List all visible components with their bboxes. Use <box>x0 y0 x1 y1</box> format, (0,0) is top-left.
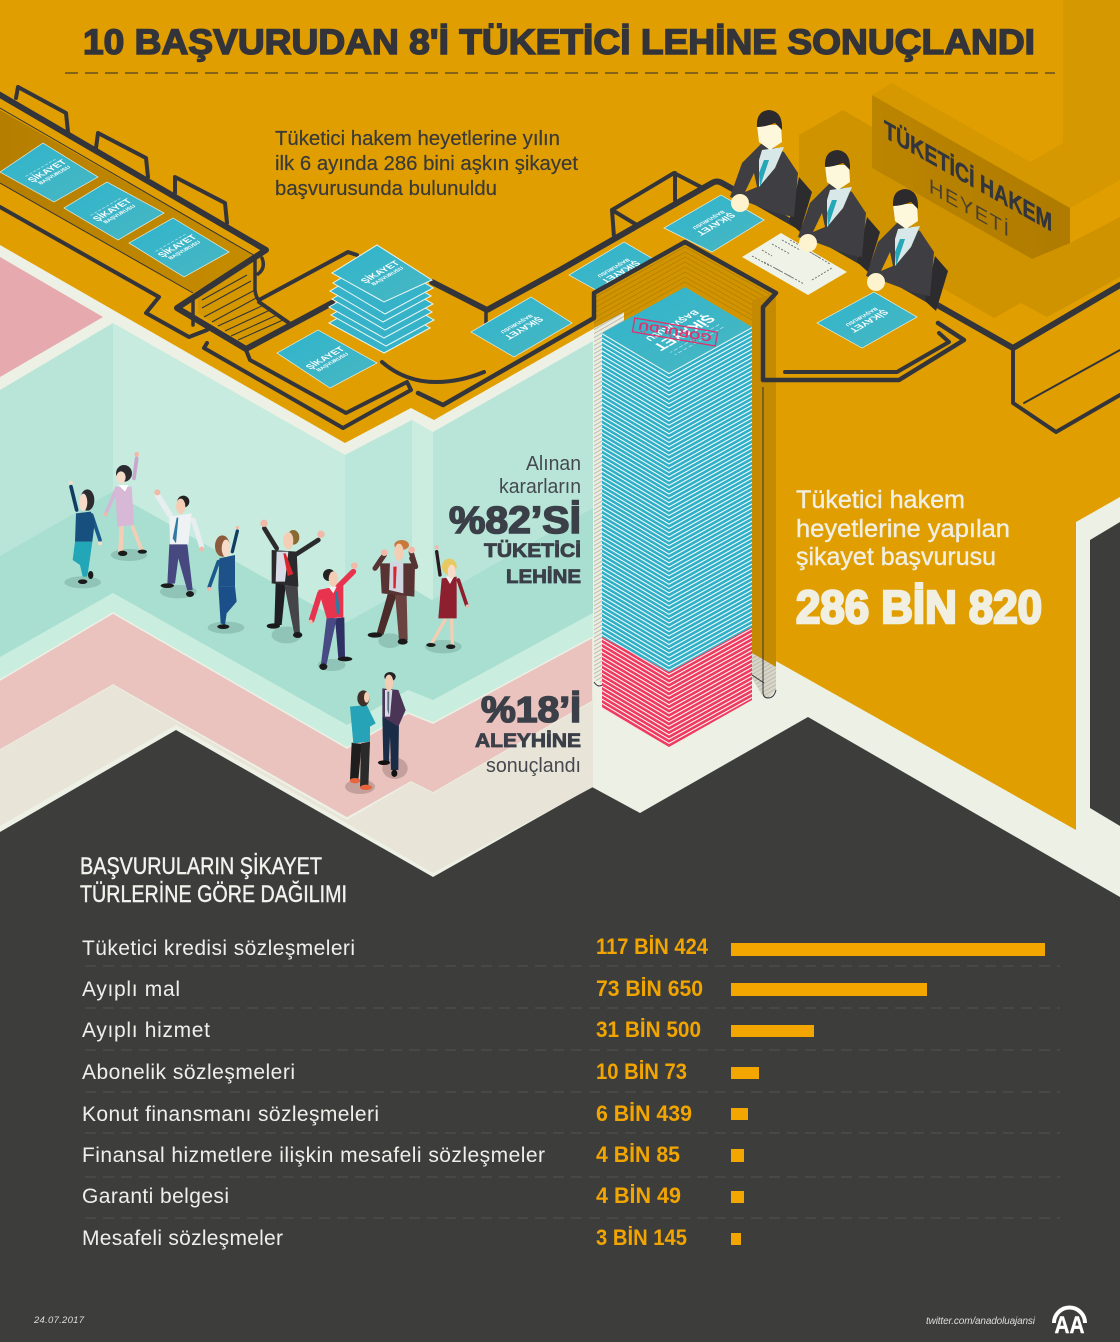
person: woman in blue suit <box>207 526 244 634</box>
inverted form right of pile: ŞİKAYET <box>501 315 546 341</box>
person: man in teal shirt <box>345 690 376 794</box>
red stamp: GÖRÜLDÜ <box>637 319 713 344</box>
callout: total complaints: heyetlerine yapılan <box>796 515 1010 543</box>
row: Mesafeli sözleşmeler: 3 BİN 145 <box>596 1225 687 1250</box>
row: Abonelik sözleşmeleri <box>82 1059 759 1084</box>
social handle: twitter.com/anadoluajansi <box>926 1316 1036 1327</box>
judges' backdrop with nameplate <box>799 0 1120 318</box>
callout: 18 percent against: ALEYHİNE <box>475 731 581 752</box>
pile of forms on table <box>329 245 434 353</box>
row: Garanti belgesi: 4 BİN 49 <box>596 1183 681 1208</box>
row: Garanti belgesi <box>82 1183 744 1208</box>
row: Mesafeli sözleşmeler: Mesafeli sözleşmeler <box>82 1227 283 1250</box>
callout: 82 percent in favour: %82’Sİ <box>449 500 581 542</box>
callout: total complaints <box>796 486 1042 633</box>
form 2: BAŞVURUSU <box>102 204 138 225</box>
title: 10 BAŞVURUDAN 8'İ TÜKETİCİ LEHİNE SONUÇLANDI <box>83 23 1035 62</box>
row: Konut finansmanı sözleşmeleri: Konut finansmanı sözleşmeleri <box>82 1103 379 1126</box>
callout: 82 percent in favour: LEHİNE <box>506 567 581 588</box>
judge 1 <box>730 110 812 232</box>
person: woman in lilac dress <box>104 452 147 561</box>
inverted form at first judge: BAŞVURUSU <box>690 209 726 230</box>
row: Ayıplı hizmet: 31 BİN 500 <box>596 1017 701 1042</box>
form near front of table: BAŞVURUSU <box>315 352 351 373</box>
callout: total complaints: 286 BİN 820 <box>796 581 1042 633</box>
person: man in brown suit <box>368 540 416 648</box>
inverted form right of pile: BAŞVURUSU <box>498 313 534 334</box>
callout: total complaints: şikayet başvurusu <box>796 543 996 571</box>
row: Konut finansmanı sözleşmeleri: 6 BİN 439 <box>596 1101 692 1126</box>
person: man in purple suit <box>378 672 408 779</box>
title divider <box>65 72 1055 74</box>
inverted form at third judge: ŞİKAYET <box>846 308 891 334</box>
intro text <box>275 128 578 200</box>
pile of forms on table: BAŞVURUSU <box>370 266 406 287</box>
row: Tüketici kredisi sözleşmeleri: 117 BİN 424 <box>596 934 709 959</box>
section heading <box>80 853 347 908</box>
row: Garanti belgesi: Garanti belgesi <box>82 1185 229 1208</box>
inverted form at third judge: BAŞVURUSU <box>843 306 879 327</box>
inverted form at third judge <box>817 292 917 348</box>
bar chart: complaint types <box>82 934 1045 1250</box>
top form of stack: ŞİKAYET <box>648 312 719 353</box>
intro text: ilk 6 ayında 286 bini aşkın şikayet <box>275 153 578 175</box>
judge 2 <box>798 150 880 272</box>
nameplate: HEYETİ: HEYETİ <box>929 174 1009 242</box>
complaint forms on tray <box>0 143 229 277</box>
table outline lines <box>0 87 1120 432</box>
person: man in black suit with red tie <box>260 520 325 643</box>
stack of complaints <box>602 287 752 747</box>
person: man in white shirt <box>154 489 204 598</box>
row: Finansal hizmetlere ilişkin mesafeli sözleşmeler: 4 BİN 85 <box>596 1142 680 1167</box>
red stamp <box>632 318 718 346</box>
inverted form at first judge <box>664 195 764 252</box>
form near front of table: ŞİKAYET <box>303 345 348 371</box>
callout: 82 percent in favour: TÜKETİCİ <box>484 541 581 562</box>
form 2 <box>64 182 164 240</box>
date: 24.07.2017 <box>33 1315 85 1326</box>
section heading: TÜRLERİNE GÖRE DAĞILIMI <box>80 881 347 908</box>
row: Konut finansmanı sözleşmeleri <box>82 1101 748 1126</box>
callout: total complaints: Tüketici hakem <box>796 486 965 514</box>
inverted form at first judge: ŞİKAYET <box>693 211 738 237</box>
row: Ayıplı mal: 73 BİN 650 <box>596 976 703 1001</box>
row: Ayıplı hizmet <box>82 1017 814 1042</box>
intro text: başvurusunda bulunuldu <box>275 178 497 200</box>
intro text: Tüketici hakem heyetlerine yılın <box>275 128 560 150</box>
inverted form beside stack: ŞİKAYET <box>598 259 643 285</box>
section heading: BAŞVURULARIN ŞİKAYET <box>80 853 322 880</box>
row: Ayıplı mal <box>82 976 927 1001</box>
row: Ayıplı mal: Ayıplı mal <box>82 978 180 1001</box>
row: Tüketici kredisi sözleşmeleri <box>82 934 1045 960</box>
callout: 18 percent against: sonuçlandı <box>486 755 581 777</box>
row: Finansal hizmetlere ilişkin mesafeli sözleşmeler: Finansal hizmetlere ilişkin mesafeli sözleşmeler <box>82 1144 545 1167</box>
open document <box>742 233 847 295</box>
nameplate: TÜKETİCİ HAKEM: TÜKETİCİ HAKEM <box>884 115 1052 237</box>
person: man in red sweater <box>309 562 358 671</box>
dark lines around stack hole <box>418 242 964 405</box>
row: Mesafeli sözleşmeler <box>82 1225 741 1250</box>
hole outline with ridged edge around stack <box>594 242 776 698</box>
form 1 <box>0 143 98 202</box>
orange table surface <box>0 0 1120 830</box>
form near front of table <box>277 330 377 388</box>
callout: 18 percent against <box>475 689 581 777</box>
person: woman in navy and teal <box>64 481 102 588</box>
row dividers <box>85 966 1060 1218</box>
row: Finansal hizmetlere ilişkin mesafeli sözleşmeler <box>82 1142 744 1167</box>
row: Ayıplı hizmet: Ayıplı hizmet <box>82 1019 210 1042</box>
row: Abonelik sözleşmeleri: Abonelik sözleşmeleri <box>82 1061 295 1084</box>
form 3 <box>129 218 229 277</box>
callout: 82 percent in favour: kararların <box>499 476 581 498</box>
pile of forms on table: ŞİKAYET <box>358 259 403 285</box>
callout: 82 percent in favour: Alınan <box>526 453 581 475</box>
icon: agency logo: AA <box>1054 1312 1084 1339</box>
row: Abonelik sözleşmeleri: 10 BİN 73 <box>596 1059 687 1084</box>
person: woman in maroon dress <box>425 545 469 653</box>
form 3: BAŞVURUSU <box>167 240 203 261</box>
inverted form beside stack <box>569 242 669 300</box>
paper ramp <box>198 258 289 347</box>
callout: 82 percent in favour <box>449 453 581 588</box>
callout: 18 percent against: %18’İ <box>481 689 581 730</box>
top form of stack <box>602 287 752 373</box>
form 1: BAŞVURUSU <box>37 165 73 186</box>
form 2: ŞİKAYET <box>90 197 135 223</box>
row: Tüketici kredisi sözleşmeleri: Tüketici kredisi sözleşmeleri <box>82 937 355 960</box>
form 1: ŞİKAYET <box>25 158 70 184</box>
inverted form right of pile <box>471 297 572 357</box>
inverted form beside stack: BAŞVURUSU <box>595 257 631 278</box>
top form of stack: BAŞVURUSU <box>643 309 701 342</box>
judge 3 <box>866 189 948 311</box>
form 3: ŞİKAYET <box>155 233 200 259</box>
paper tray <box>0 108 257 293</box>
